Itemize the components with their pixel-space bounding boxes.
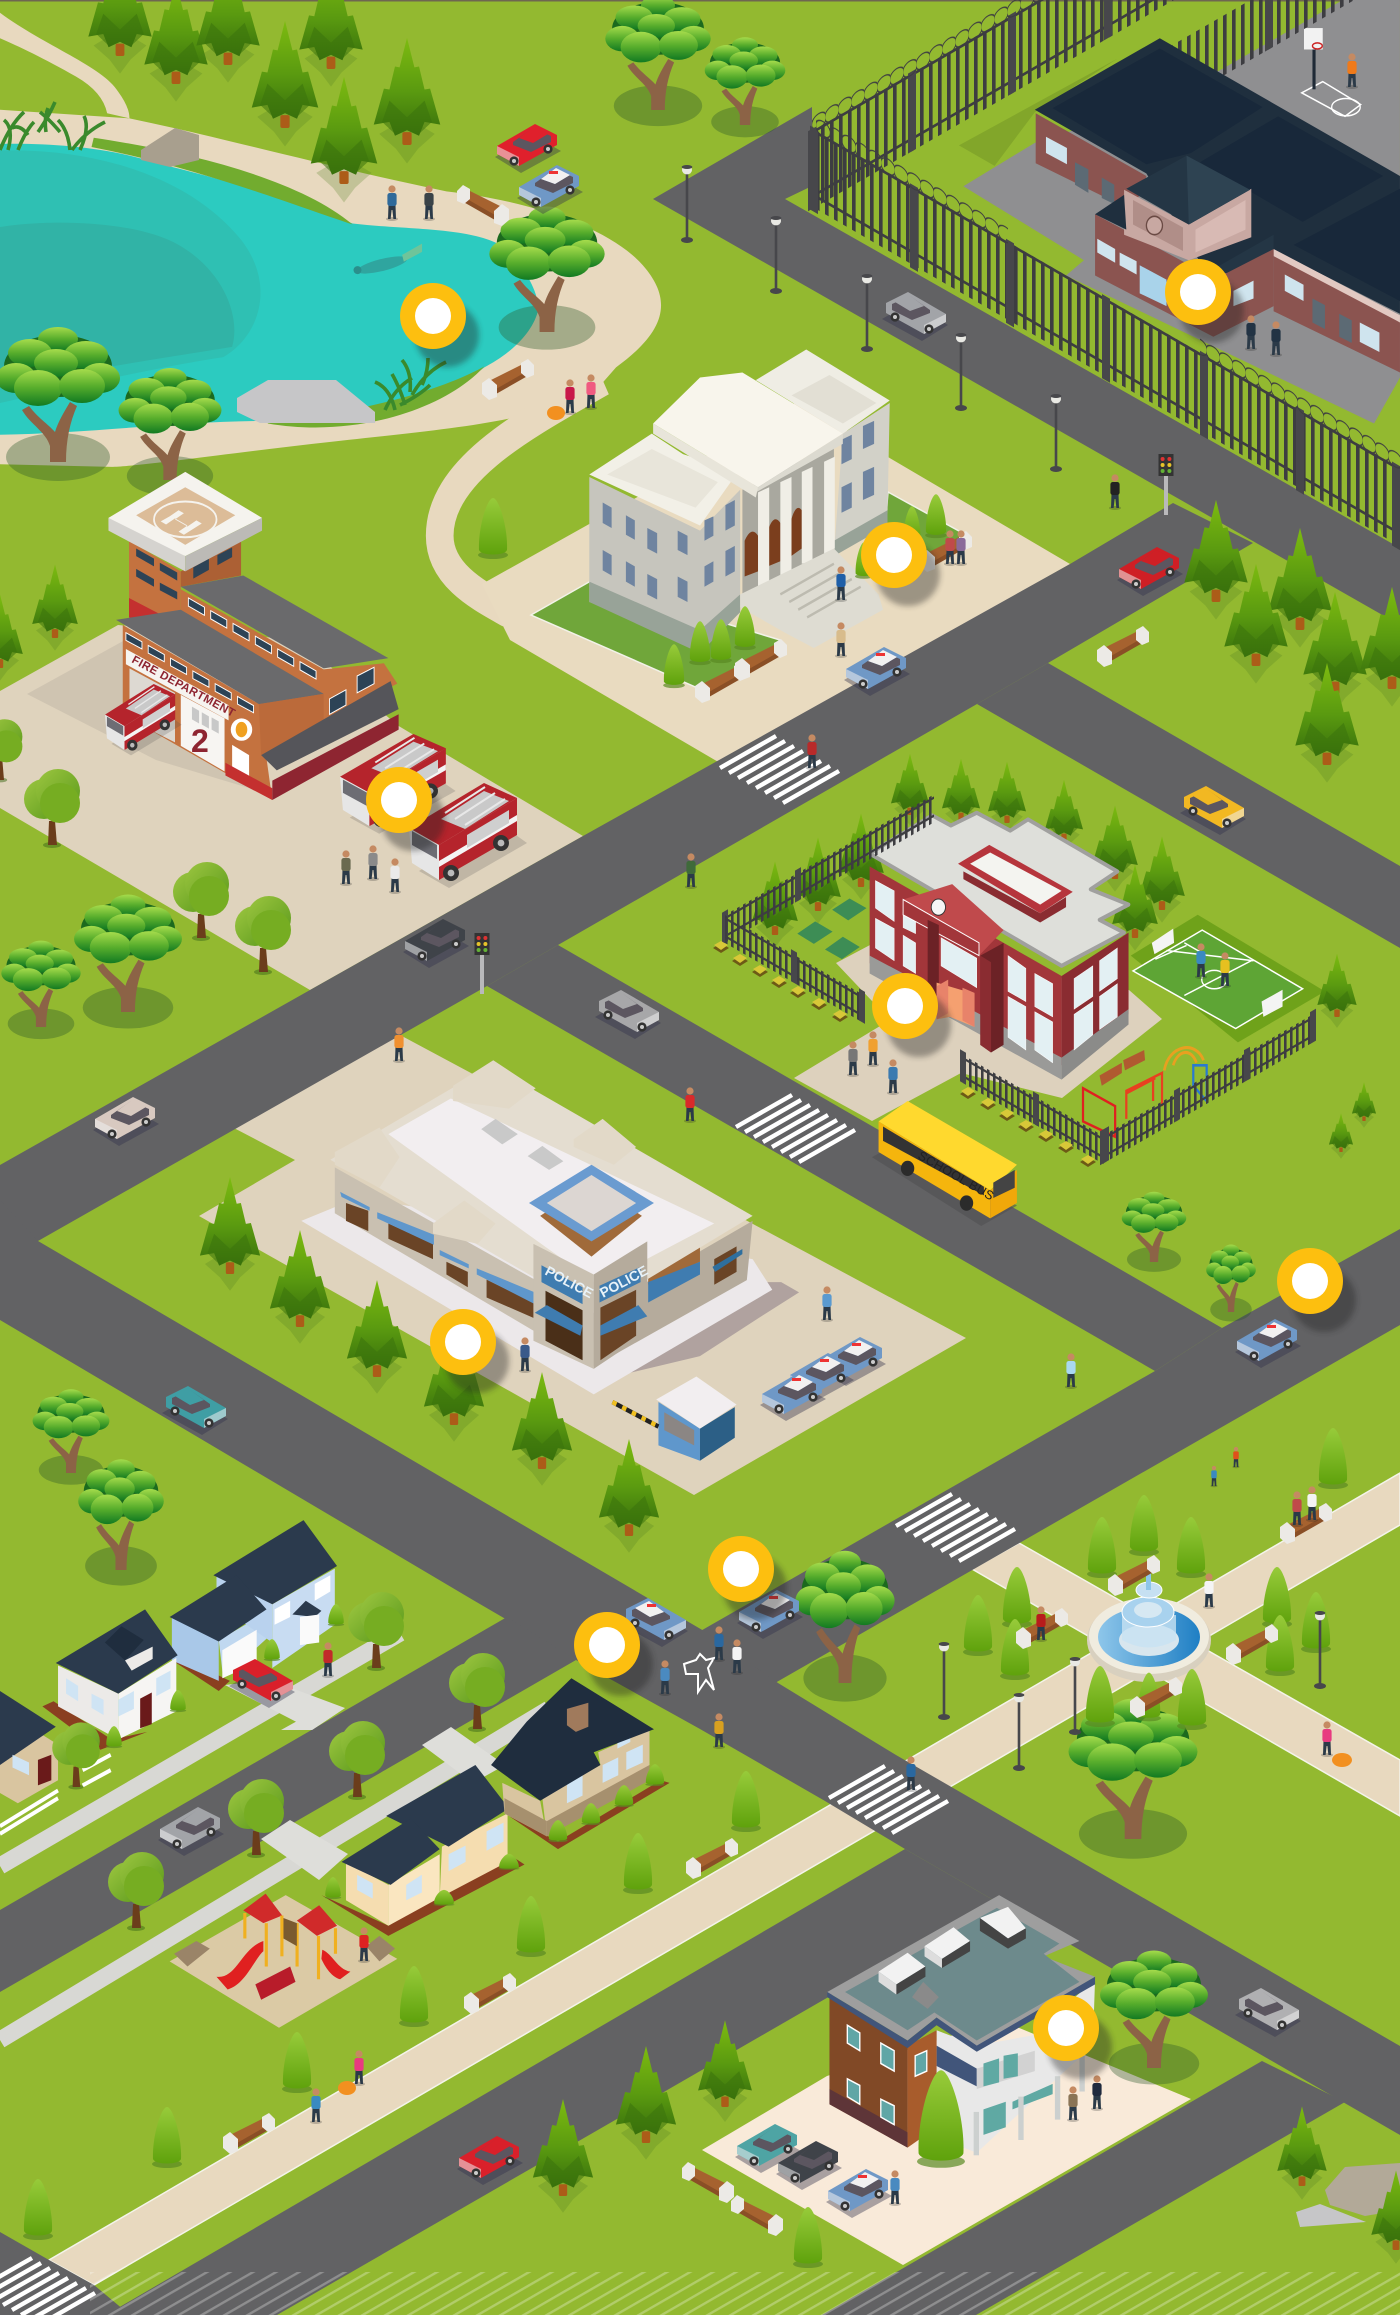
marker: office (1033, 1995, 1112, 2079)
fire trucks (105, 684, 527, 888)
tan right house walls (502, 1783, 547, 1836)
tan house left (0, 1729, 58, 1803)
lake footpath (0, 13, 661, 467)
benches (223, 185, 1332, 2236)
front wall (335, 1167, 594, 1366)
bottom fade stripes (90, 2272, 1400, 2315)
flame badge (231, 718, 252, 741)
chalk body outline (684, 1654, 714, 1692)
office building (827, 1895, 1095, 2155)
office plaza (702, 2020, 1191, 2265)
cream house walls (346, 1862, 388, 1926)
tower (533, 1244, 594, 1369)
fire department sign: FIRE DEPARTMENT (130, 654, 237, 720)
prison outer fence rear (808, 0, 1369, 211)
right wing walls (834, 403, 890, 554)
lake water (0, 144, 538, 435)
glass wing (937, 1979, 1095, 2153)
white house walls (58, 1666, 118, 1739)
plazas (0, 400, 1191, 2265)
courthouse (589, 349, 890, 653)
garage door (181, 695, 225, 771)
front trees (0, 494, 1400, 2268)
entrance stairs (740, 548, 883, 648)
school doors (937, 983, 975, 1027)
flower beds (713, 941, 1096, 1167)
garage opening (129, 668, 175, 742)
school roof (870, 813, 1129, 966)
school walls (870, 866, 1062, 1065)
marker: traffic stop (1277, 1248, 1356, 1332)
school windows (875, 881, 1117, 1063)
building shadow (625, 1282, 799, 1374)
tan right house roof (491, 1678, 654, 1801)
police station (301, 1060, 799, 1394)
white picket fence (0, 1755, 111, 1834)
lake banks (92, 138, 484, 427)
houses (0, 1520, 670, 2028)
portico and columns (742, 444, 834, 597)
prison roof (1035, 38, 1400, 314)
bus label: SCHOOL BUS (916, 1148, 997, 1203)
prison grounds (959, 0, 1400, 423)
prison front fence (810, 110, 1400, 554)
police sign left: POLICE (543, 1263, 596, 1301)
prison left wing wall (1036, 113, 1146, 209)
rear wing (181, 576, 388, 668)
deep water zones (0, 150, 261, 403)
benches at school (1100, 1063, 1122, 1086)
marker: police station (430, 1309, 509, 1393)
ping pong tables (797, 921, 833, 944)
blue house roofs (213, 1520, 337, 1604)
prison building (1035, 38, 1400, 372)
marker: courthouse (861, 522, 940, 606)
police sign right: POLICE (597, 1262, 650, 1301)
playground (170, 1895, 397, 2028)
control tower (129, 541, 181, 640)
brick walls (829, 1997, 908, 2148)
prison entrance block (1095, 214, 1274, 337)
school plaza (794, 945, 1162, 1121)
people (310, 53, 1358, 2206)
parapet blocks (335, 1128, 400, 1188)
front parked truck (409, 783, 527, 888)
lake and surrounding path (0, 13, 661, 612)
park fountain (1087, 1562, 1211, 1682)
HVAC units (481, 1119, 518, 1144)
school bus (872, 1101, 1017, 1226)
roofs (756, 349, 890, 434)
curved path to courthouse (440, 380, 603, 612)
lean-to roof (261, 681, 399, 770)
courthouse plaza (482, 400, 1070, 763)
fire station plaza (0, 625, 583, 990)
rear parked truck (340, 734, 456, 834)
location markers (366, 259, 1356, 2079)
guard booth (612, 1377, 737, 1461)
school fences (722, 790, 1316, 1165)
marker: lake (400, 283, 479, 367)
truck at garage (105, 684, 182, 755)
marker: fire department (366, 767, 445, 851)
left wing walls (589, 477, 740, 638)
sign band (126, 649, 229, 720)
cars (93, 124, 1301, 2218)
school portico (903, 884, 1004, 956)
diver in lake (351, 244, 426, 278)
police plaza (199, 1035, 966, 1495)
lamps and traffic lights (474, 165, 1326, 1771)
front wing windows (126, 633, 254, 713)
platform (301, 1198, 772, 1394)
white house roof (56, 1609, 178, 1694)
crosswalks (0, 736, 1015, 2315)
reeds (0, 102, 446, 410)
marker: crime scene east (708, 1536, 787, 1620)
station number: 2 (191, 723, 209, 759)
park paths (49, 1473, 1400, 2285)
marker: prison (1165, 259, 1244, 343)
prison right wing wall (1274, 253, 1400, 372)
school (797, 813, 1325, 1137)
right wall (594, 1221, 753, 1366)
rooftop units (879, 1953, 925, 1984)
rear wing windows (188, 598, 374, 747)
blue house walls (172, 1617, 219, 1681)
helipad (108, 472, 262, 556)
playground gear (1083, 1088, 1115, 1137)
main roof (330, 1065, 753, 1312)
cream house roofs (386, 1765, 509, 1847)
fire department (108, 472, 399, 800)
strollers (338, 406, 1352, 2095)
residential sidewalks (0, 1633, 549, 2040)
yard mulch (176, 1655, 230, 1691)
trees behind buildings (0, 0, 1185, 951)
basketball court (1302, 82, 1361, 116)
house shrubs (106, 1604, 665, 1906)
roof (827, 1895, 1095, 2048)
soccer field (1131, 915, 1325, 1042)
front wing wall (123, 625, 272, 800)
marker: school (872, 973, 951, 1057)
marker: crime scene west (574, 1612, 653, 1696)
